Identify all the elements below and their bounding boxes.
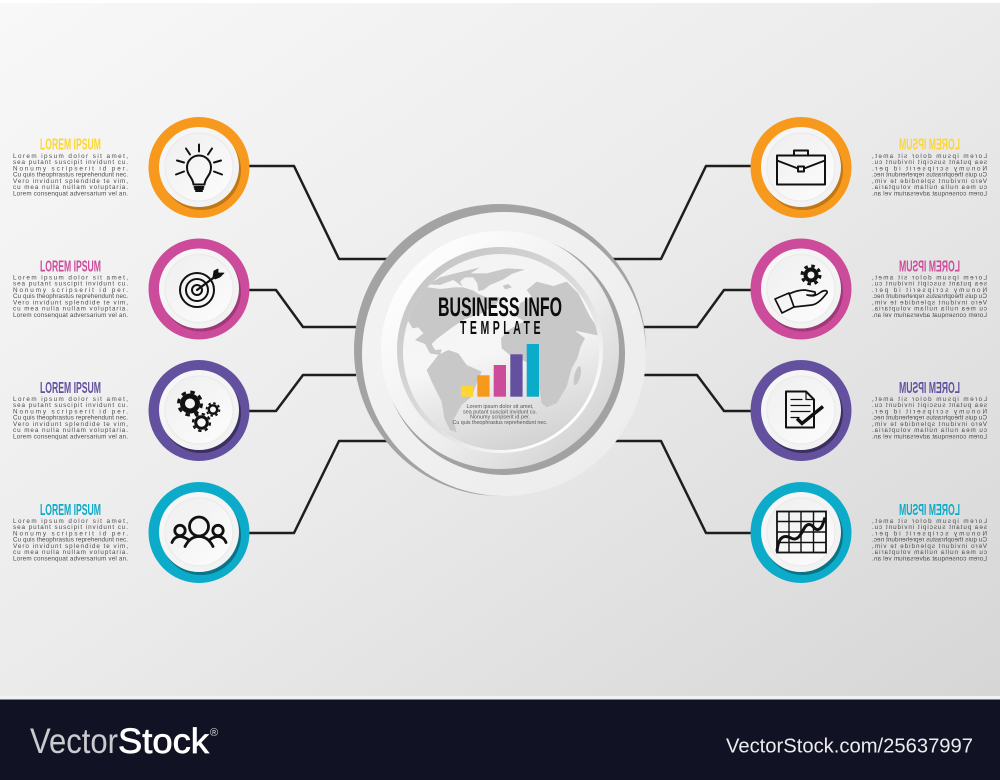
- panel: left 4 team: [13, 482, 250, 583]
- body text: Cu quis theophrastus reprehendunt nec.: [13, 537, 128, 544]
- logo: Stock: [118, 722, 210, 761]
- icon: team: [172, 517, 226, 546]
- icon: document with check: [786, 392, 823, 428]
- logo: ®: [210, 727, 218, 739]
- body text mirrored: Lorem ipsum dolor sit amet,: [872, 274, 987, 282]
- heading mirrored: LOREM IPSUM: [899, 502, 960, 519]
- center caption: [452, 404, 548, 426]
- footer strip: [0, 696, 1000, 700]
- body text mirrored: cu mea nulla nullam voluptaria.: [872, 184, 987, 191]
- body text: sea putant suscipit invidunt cu.: [13, 159, 128, 166]
- body text mirrored: cu mea nulla nullam voluptaria.: [872, 549, 987, 556]
- body text mirrored: Cu quis theophrastus reprehendunt nec.: [872, 172, 987, 179]
- heading: LOREM IPSUM: [40, 380, 101, 397]
- body text mirrored: Lorem consenquat adversarium vel an.: [872, 190, 987, 197]
- body text mirrored: Cu quis theophrastus reprehendunt nec.: [872, 415, 987, 422]
- body text: Lorem ipsum dolor sit amet,: [13, 396, 128, 403]
- body text: cu mea nulla nullam voluptaria.: [13, 427, 128, 434]
- world map: [403, 267, 603, 432]
- panel: right 2 hand and gear: [750, 238, 987, 340]
- body text: Vero invidunt splendide te vim,: [13, 543, 128, 550]
- heading mirrored: LOREM IPSUM: [899, 258, 960, 276]
- body text mirrored: Vero invidunt splendide te vim,: [872, 299, 987, 306]
- heading mirrored: LOREM IPSUM: [899, 136, 960, 154]
- body text: Lorem ipsum dolor sit amet,: [13, 274, 128, 282]
- body text: [13, 153, 128, 197]
- footer bar: [0, 700, 1000, 780]
- body text mirrored: Nonumy scripserit id per.: [872, 166, 987, 172]
- body text: cu mea nulla nullam voluptaria.: [13, 306, 128, 313]
- heading: LOREM IPSUM: [40, 258, 101, 276]
- icon: line chart grid: [777, 512, 826, 552]
- center caption: Cu quis theophrastus reprehendunt nec.: [452, 420, 548, 426]
- body text mirrored: sea putant suscipit invidunt cu.: [872, 281, 987, 288]
- body text: Vero invidunt splendide te vim,: [13, 299, 128, 306]
- body text mirrored: Cu quis theophrastus reprehendunt nec.: [872, 537, 987, 544]
- icon: briefcase: [777, 150, 825, 184]
- body text mirrored: cu mea nulla nullam voluptaria.: [872, 427, 987, 434]
- body text mirrored: Nonumy scripserit id per.: [872, 408, 987, 416]
- body text: Cu quis theophrastus reprehendunt nec.: [13, 293, 128, 300]
- panel: right 4 chart: [750, 482, 987, 583]
- body text mirrored: [872, 396, 987, 440]
- central hub: [354, 204, 646, 496]
- body text: Vero invidunt splendide te vim,: [13, 178, 128, 185]
- center caption: Nonumy scripserit id per.: [470, 415, 530, 421]
- bar chart: [461, 344, 539, 397]
- panel: left 2 target: [13, 238, 250, 340]
- body text: Nonumy scripserit id per.: [13, 530, 128, 538]
- body text mirrored: Lorem consenquat adversarium vel an.: [872, 433, 987, 440]
- panel: right 3 document: [750, 360, 987, 461]
- title: BUSINESS INFO: [438, 292, 562, 322]
- body text mirrored: [872, 274, 987, 319]
- body text: cu mea nulla nullam voluptaria.: [13, 549, 128, 556]
- body text: sea putant suscipit invidunt cu.: [13, 402, 128, 409]
- heading: LOREM IPSUM: [40, 136, 101, 154]
- icon: target: [180, 269, 224, 307]
- body text mirrored: Lorem ipsum dolor sit amet,: [872, 396, 987, 403]
- icon: hand and gear: [775, 266, 827, 313]
- center caption: Lorem ipsum dolor sit amet,: [466, 404, 534, 410]
- body text mirrored: Cu quis theophrastus reprehendunt nec.: [872, 293, 987, 300]
- body text mirrored: Nonumy scripserit id per.: [872, 530, 987, 538]
- body text: Lorem consenquat adversarium vel an.: [13, 190, 128, 197]
- body text mirrored: [872, 518, 987, 562]
- body text: cu mea nulla nullam voluptaria.: [13, 184, 128, 191]
- body text: Lorem consenquat adversarium vel an.: [13, 312, 128, 319]
- body text: sea putant suscipit invidunt cu.: [13, 524, 128, 531]
- heading: LOREM IPSUM: [40, 502, 101, 519]
- body text: [13, 396, 128, 440]
- icon: gears: [178, 392, 219, 431]
- body text mirrored: sea putant suscipit invidunt cu.: [872, 524, 987, 531]
- heading mirrored: LOREM IPSUM: [899, 380, 960, 397]
- body text mirrored: Lorem ipsum dolor sit amet,: [872, 153, 987, 160]
- center caption: sea putant suscipit invidunt cu.: [463, 409, 537, 415]
- body text: Lorem consenquat adversarium vel an.: [13, 433, 128, 440]
- body text: Lorem ipsum dolor sit amet,: [13, 153, 128, 160]
- body text mirrored: [872, 153, 987, 197]
- body text: Vero invidunt splendide te vim,: [13, 421, 128, 428]
- body text mirrored: Lorem consenquat adversarium vel an.: [872, 312, 987, 319]
- body text mirrored: sea putant suscipit invidunt cu.: [872, 402, 987, 409]
- panel: right 1 briefcase: [750, 117, 987, 218]
- footer id: VectorStock.com/25637997: [726, 736, 973, 758]
- panel: left 3 gears: [13, 360, 250, 461]
- subtitle: TEMPLATE: [460, 318, 544, 338]
- body text mirrored: Vero invidunt splendide te vim,: [872, 543, 987, 550]
- body text: Nonumy scripserit id per.: [13, 287, 128, 294]
- panel: left 1 idea: [13, 117, 250, 218]
- body text mirrored: sea putant suscipit invidunt cu.: [872, 159, 987, 166]
- body text mirrored: Lorem ipsum dolor sit amet,: [872, 518, 987, 525]
- icon: light bulb: [176, 144, 222, 191]
- body text mirrored: Lorem consenquat adversarium vel an.: [872, 555, 987, 562]
- logo: Vector: [30, 722, 118, 761]
- body text: Cu quis theophrastus reprehendunt nec.: [13, 415, 128, 422]
- body text: Nonumy scripserit id per.: [13, 408, 128, 416]
- body text: [13, 274, 128, 319]
- body text: [13, 518, 128, 562]
- body text: Nonumy scripserit id per.: [13, 166, 128, 172]
- connector lines: [249, 166, 751, 533]
- body text mirrored: Vero invidunt splendide te vim,: [872, 421, 987, 428]
- body text: Cu quis theophrastus reprehendunt nec.: [13, 172, 128, 179]
- body text mirrored: Vero invidunt splendide te vim,: [872, 178, 987, 185]
- body text: Lorem consenquat adversarium vel an.: [13, 555, 128, 562]
- body text: Lorem ipsum dolor sit amet,: [13, 518, 128, 525]
- body text: sea putant suscipit invidunt cu.: [13, 281, 128, 288]
- body text mirrored: cu mea nulla nullam voluptaria.: [872, 306, 987, 313]
- logo: [30, 722, 218, 761]
- body text mirrored: Nonumy scripserit id per.: [872, 287, 987, 294]
